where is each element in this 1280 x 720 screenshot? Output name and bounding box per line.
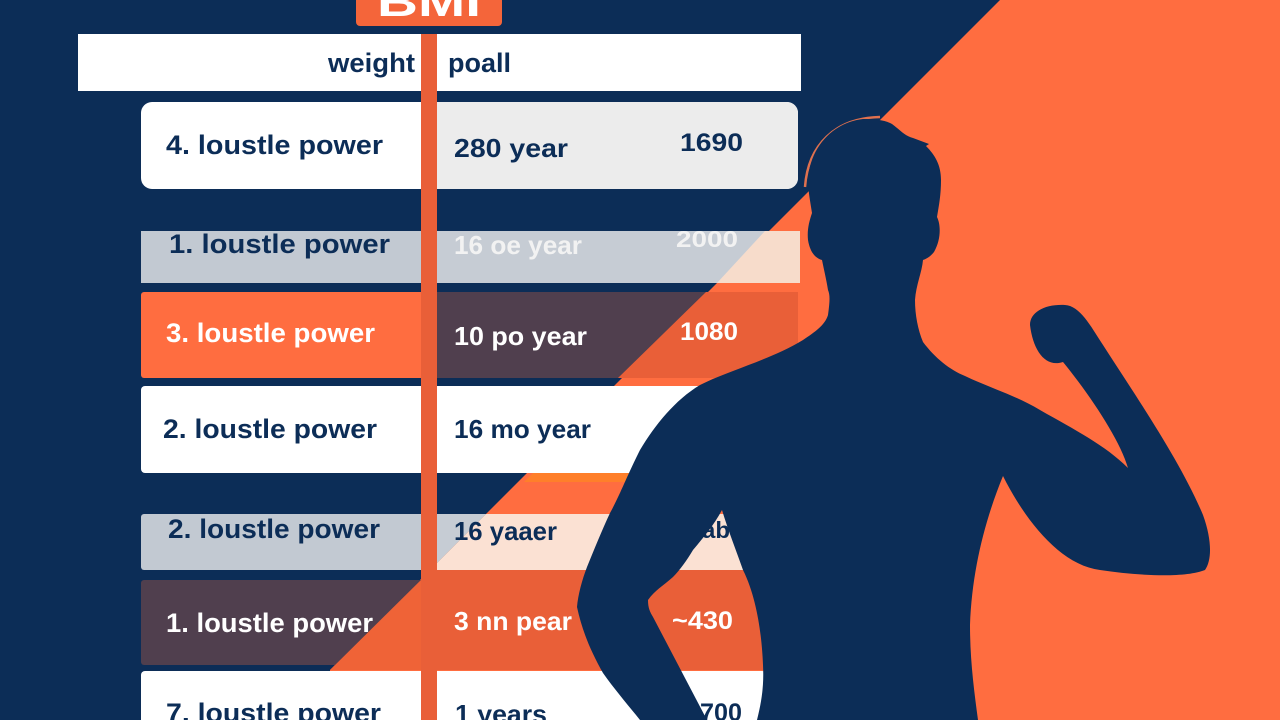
row: 2 pale: 2. loustle power — [168, 514, 381, 544]
table header — [78, 34, 801, 91]
row: 2 pale — [141, 514, 760, 570]
row: 2 pale: ab — [702, 517, 730, 543]
row: 1 dark: 3 nn pear — [454, 606, 572, 636]
row: 3 orange: 3. loustle power — [166, 318, 376, 348]
bright orange band — [524, 473, 700, 482]
row: 1 pale — [141, 226, 800, 283]
row: 4: 280 year — [454, 133, 568, 163]
row: 2 pale: 16 yaaer — [454, 516, 557, 546]
row: 1 dark — [141, 570, 766, 670]
icon: flexing person silhouette — [577, 117, 1210, 720]
row: 7 white — [141, 671, 766, 720]
row: 1 dark: 1. loustle power — [166, 608, 373, 638]
row: 1 dark: ~430 — [672, 607, 733, 635]
row: 1 pale: 16 oe year — [454, 230, 582, 260]
row: 1 pale: 2000 — [676, 226, 738, 252]
orange diagonal background — [330, 0, 1280, 720]
row: 4 — [141, 102, 798, 189]
row: 3 orange: 1080 — [680, 318, 738, 346]
row: 4: 4. loustle power — [166, 130, 384, 160]
row: 2 white — [141, 386, 741, 473]
table header: poall — [448, 48, 511, 78]
row: 4: 1690 — [680, 129, 743, 157]
row: 3 orange: 10 po year — [454, 321, 587, 351]
row: 2 white: 16 mo year — [454, 414, 591, 444]
row: 3 orange — [141, 292, 798, 378]
row: 1 pale: 1. loustle power — [169, 229, 391, 259]
row: 2 white: 2. loustle power — [163, 414, 378, 444]
center vertical bar — [421, 34, 437, 720]
BMI title tag — [356, 0, 502, 26]
table header: weight — [327, 48, 415, 78]
